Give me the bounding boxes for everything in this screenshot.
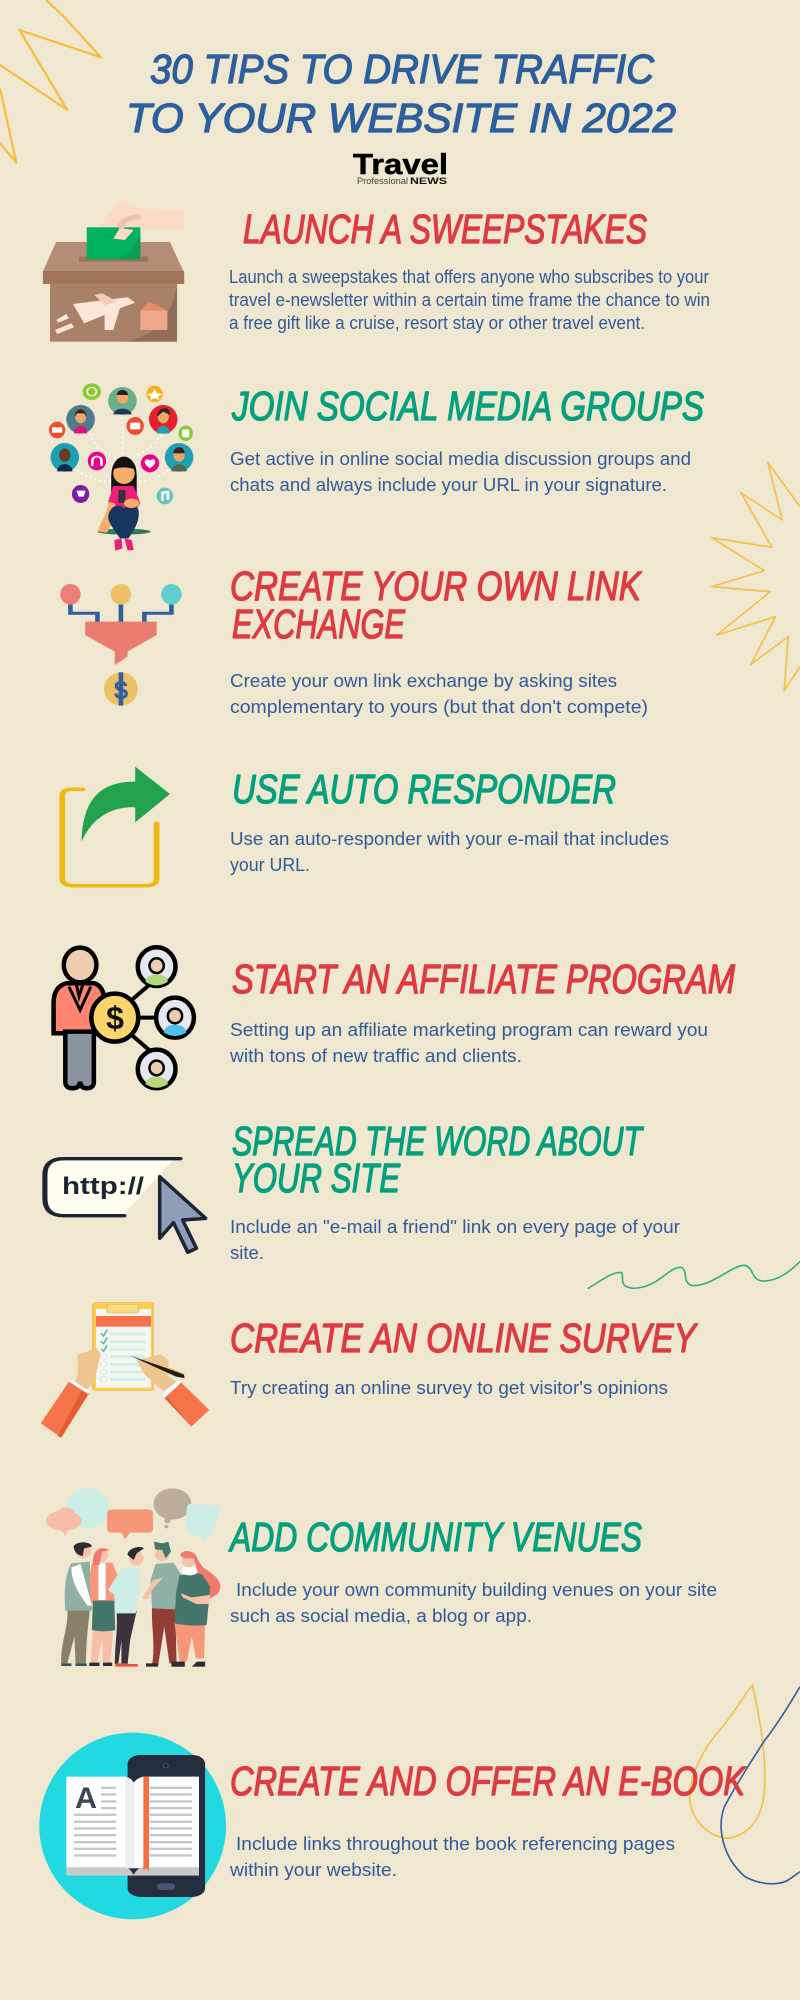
heading: create your own link exchange [230,563,642,647]
heading: spread the word about your site: SPREAD THE WORD ABOUT [232,1118,644,1164]
text: start an affiliate program: Setting up an affiliate marketing program can reward you [230,1020,708,1040]
person 5 [172,1551,220,1667]
text: join social media groups: Get active in online social media discussion groups and [230,449,691,469]
doodle: yellow zigzag top left [0,0,101,163]
person 2 [89,1548,120,1666]
text: create an online survey: Try creating an online survey to get visitor's opinions [230,1378,668,1398]
heading: create your own link exchange: CREATE YOUR OWN LINK [230,563,642,609]
text: use auto responder: Use an auto-responder with your e-mail that includes [230,829,669,849]
heading: create your own link exchange: EXCHANGE [232,601,405,647]
text: add community venues [230,1580,717,1626]
icon: ballot box with hand [43,200,185,342]
text: add community venues: such as social media, a blog or app. [230,1606,532,1626]
text: launch a sweepstakes: a free gift like a cruise, resort stay or other travel event. [229,313,645,333]
girl figure [97,457,151,551]
title: 30 TIPS TO DRIVE TRAFFIC [150,46,654,92]
icon: funnel with dollar [60,584,182,706]
logo: Travel Professional News: NEWS [410,176,447,186]
doodle: yellow and blue loops [690,1685,800,1884]
heading: use auto responder: USE AUTO RESPONDER [232,766,616,812]
logo: Travel Professional News: Travel [353,149,448,181]
text: create and offer an e-book: within your website. [229,1860,397,1880]
icon: group of people talking [46,1488,220,1667]
person 1 [61,1542,92,1666]
text: create and offer an e-book: Include links throughout the book referencing pages [236,1834,675,1854]
text: spread the word about your site [230,1217,680,1263]
icon: affiliate person with network [54,947,194,1088]
text: start an affiliate program: with tons of new traffic and clients. [229,1046,522,1066]
title [126,46,676,141]
person 4 [142,1542,185,1667]
doodle: green squiggle [588,1262,800,1289]
text: create your own link exchange: Create your own link exchange by asking sites [230,671,617,691]
text: spread the word about your site: Include an "e-mail a friend" link on every page of your [230,1217,680,1237]
heading: create an online survey: CREATE AN ONLINE SURVEY [230,1315,698,1361]
text: start an affiliate program [229,1020,708,1066]
text: create your own link exchange [230,671,648,717]
doodle: yellow starburst right [712,463,800,691]
icon: open book on phone in cyan circle: A [75,1782,97,1815]
text: use auto responder: your URL. [230,855,310,875]
icon: clipboard survey with hands [41,1303,209,1438]
icon: http address bar with cursor [45,1159,206,1252]
text: launch a sweepstakes: Launch a sweepstakes that offers anyone who subscribes to your [229,267,709,287]
person 3 [108,1547,144,1667]
icon: open book on phone in cyan circle [39,1733,226,1919]
title: TO YOUR WEBSITE IN 2022 [126,95,676,141]
text: join social media groups: chats and always include your URL in your signature. [230,475,667,495]
heading: launch a sweepstakes: LAUNCH A SWEEPSTAKES [243,206,647,252]
heading: join social media groups: JOIN SOCIAL MEDIA GROUPS [231,383,704,429]
text: launch a sweepstakes: travel e-newsletter within a certain time frame the chance to win [229,290,710,310]
heading: spread the word about your site: YOUR SITE [232,1155,400,1201]
heading: spread the word about your site [232,1118,644,1201]
icon: share arrow in frame [62,767,170,886]
heading: add community venues: ADD COMMUNITY VENUES [228,1514,642,1560]
text: join social media groups [230,449,691,495]
text: spread the word about your site: site. [230,1243,264,1263]
icon: social media network with girl [49,383,193,551]
text: create and offer an e-book [229,1834,675,1880]
text: create your own link exchange: complementary to yours (but that don't compete) [230,697,648,717]
text: launch a sweepstakes [229,267,710,333]
icon: funnel with dollar: $ [114,675,129,705]
logo: Travel Professional News: Professional [357,176,408,186]
text: add community venues: Include your own community building venues on your site [236,1580,717,1600]
avatar faces [52,387,189,501]
text: use auto responder [230,829,669,875]
icon: http address bar with cursor: http:// [62,1173,144,1200]
icon: affiliate person with network: $ [106,1000,124,1036]
